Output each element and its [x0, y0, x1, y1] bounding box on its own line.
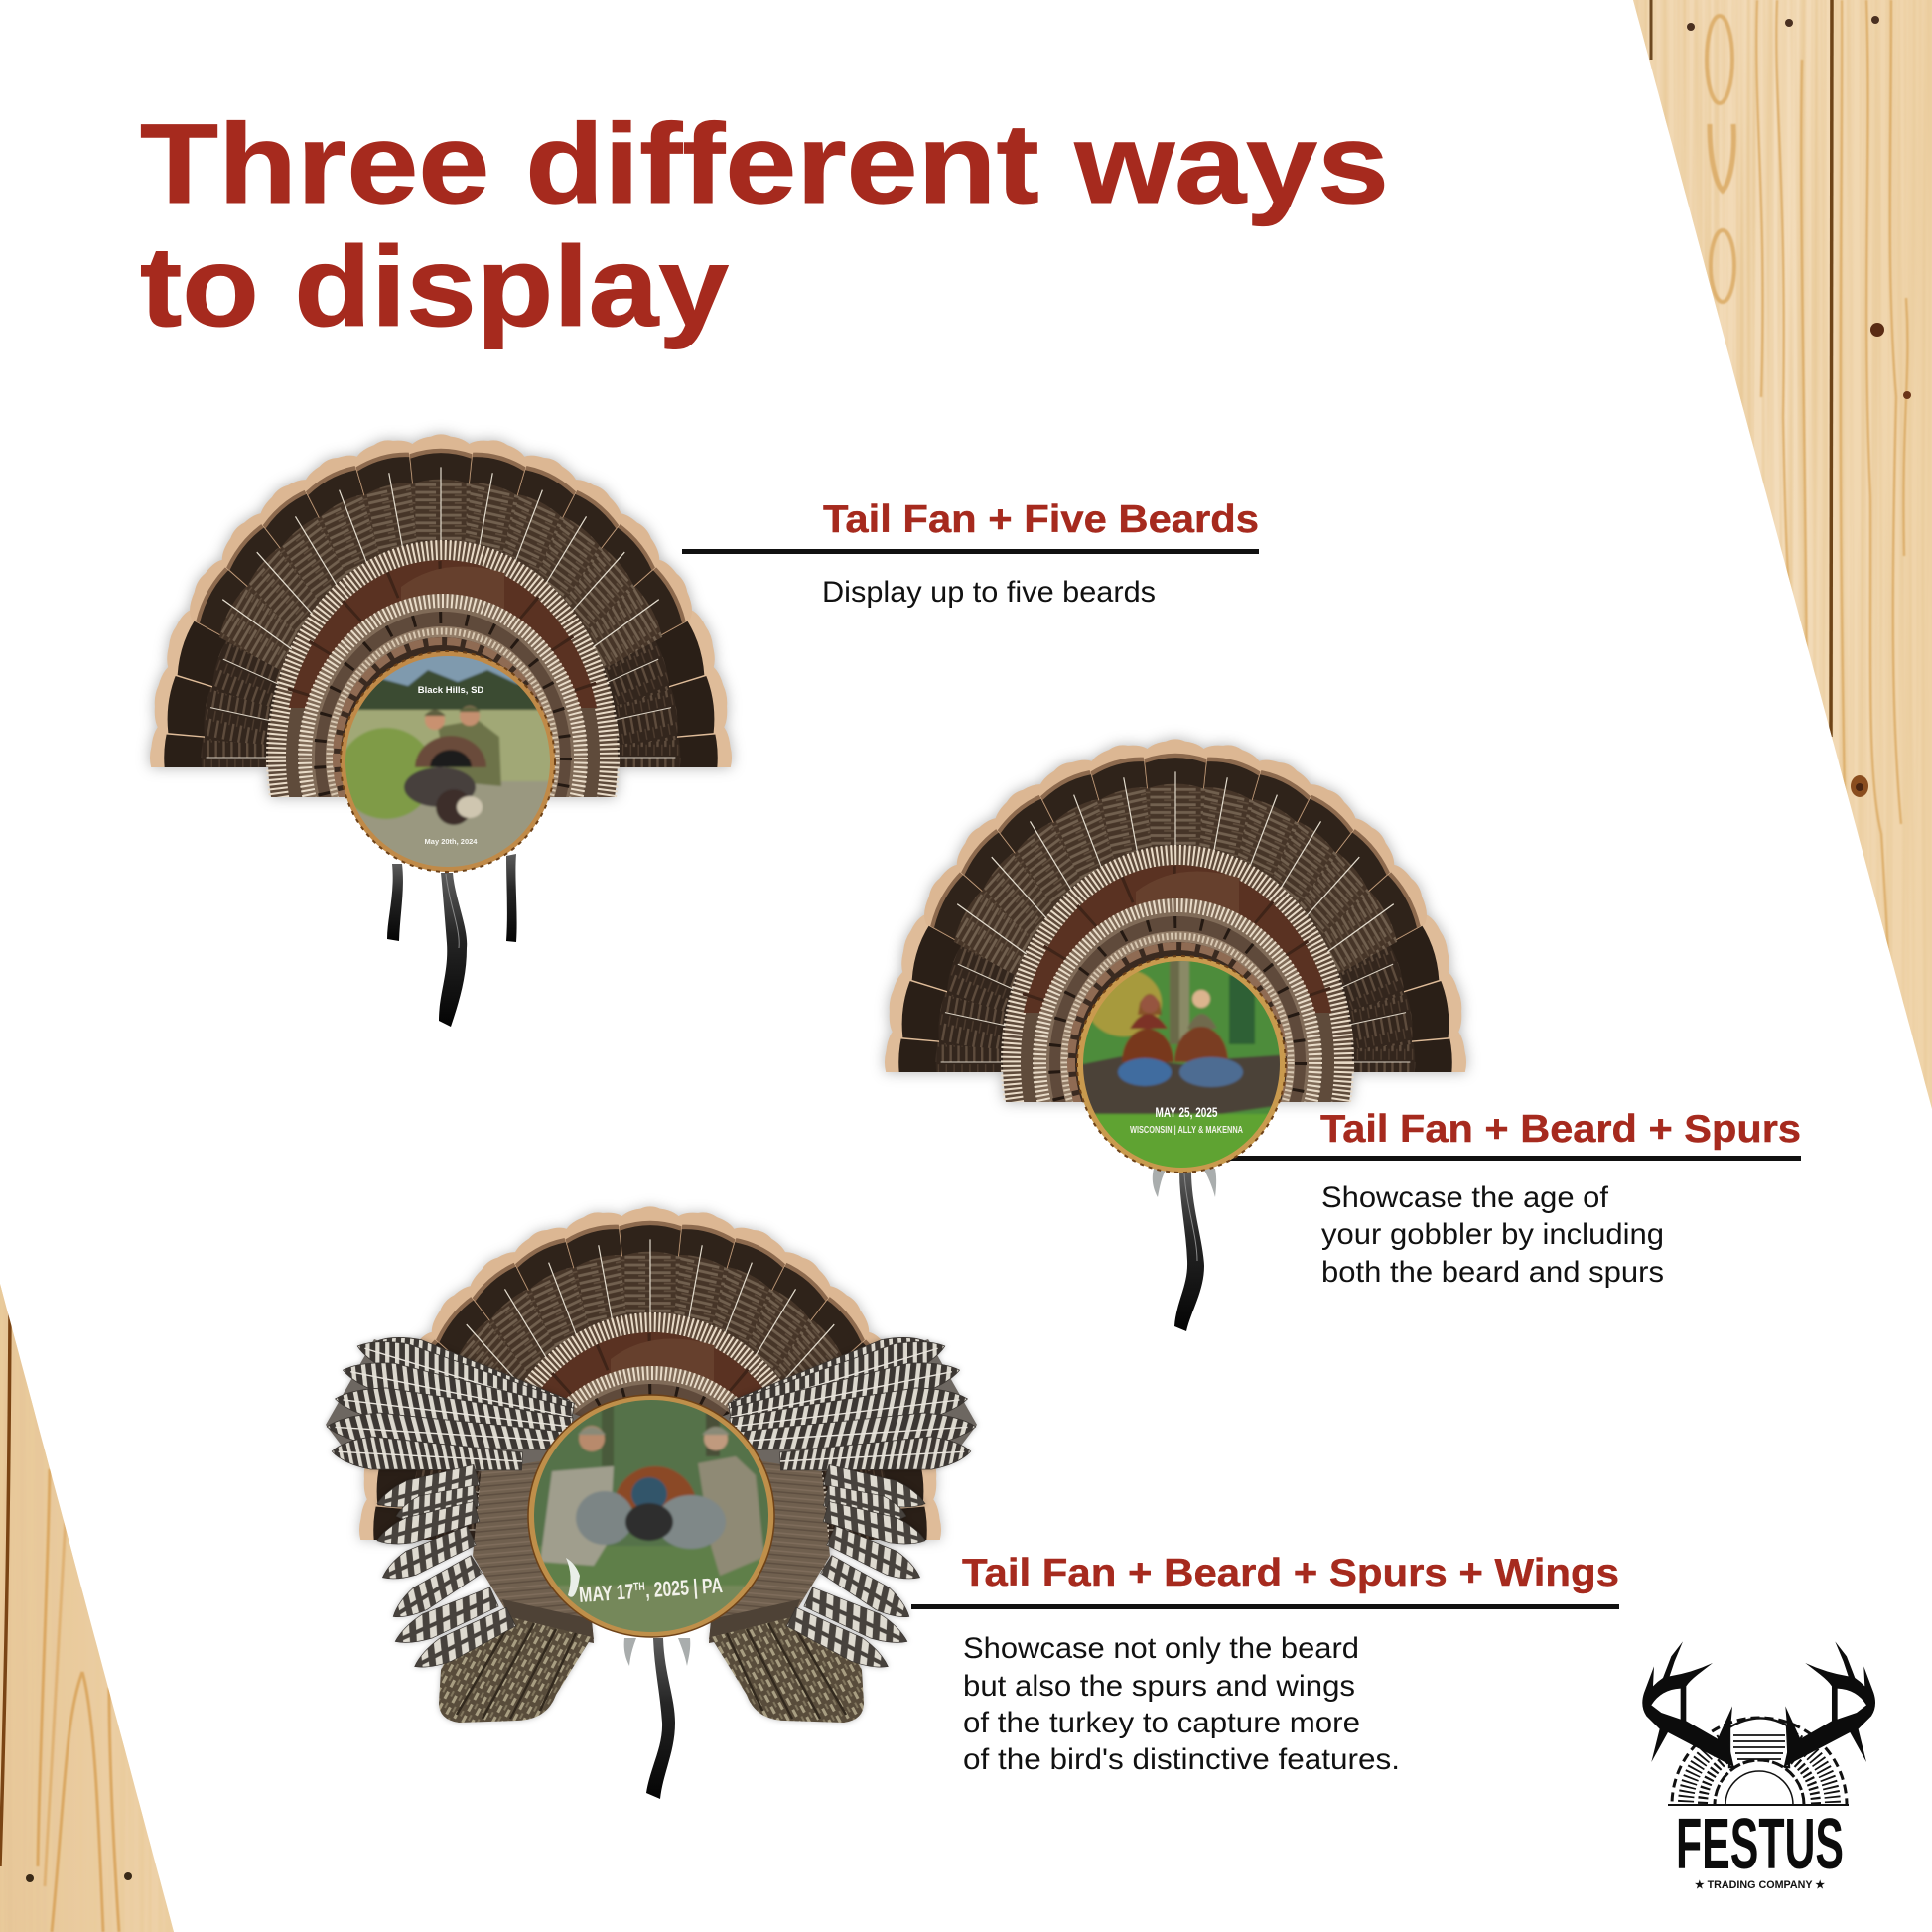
body text: both the beard and spurs	[1321, 1256, 1664, 1289]
tail fan	[884, 739, 1467, 1279]
callout: tail fan + beard + spurs	[1320, 1108, 1801, 1289]
product 3: tail fan with beard, spurs and wings	[326, 1206, 977, 1799]
logo tagline: ★ TRADING COMPANY ★	[1695, 1879, 1825, 1891]
logo icon: antlers	[1642, 1641, 1875, 1767]
body text	[963, 1632, 1400, 1776]
heading: Tail Fan + Beard + Spurs + Wings	[962, 1552, 1619, 1594]
left wing	[326, 1326, 594, 1723]
body text: of the turkey to capture more	[963, 1707, 1360, 1739]
photo disc: MAY 25, 2025	[1156, 1104, 1218, 1120]
photo disc	[527, 1392, 775, 1640]
title	[140, 101, 1389, 350]
body text: Showcase the age of	[1321, 1181, 1609, 1214]
heading: Tail Fan + Five Beards	[823, 498, 1259, 541]
callout: tail fan + five beards	[822, 498, 1259, 609]
body text	[1321, 1181, 1664, 1289]
photo disc: May 20th, 2024	[425, 837, 478, 846]
photo disc	[339, 651, 557, 872]
photo disc: MAY 17	[578, 1581, 634, 1608]
photo disc: TH	[633, 1581, 645, 1594]
title: to display	[140, 224, 729, 350]
leader line: tail fan five beards	[682, 549, 1259, 554]
right wing	[709, 1326, 977, 1723]
photo disc: Black Hills, SD	[418, 685, 483, 696]
product 1: tail fan with five beards	[149, 434, 733, 1027]
heading: Tail Fan + Beard + Spurs	[1320, 1108, 1801, 1151]
tail fan	[358, 1206, 942, 1746]
photo disc	[1072, 955, 1291, 1173]
logo icon: turkey fan	[1668, 1716, 1849, 1806]
callout: tail fan + beard + spurs + wings	[962, 1552, 1619, 1776]
body text: your gobbler by including	[1321, 1218, 1664, 1251]
beards	[387, 854, 517, 1027]
leader line: tail fan beard spurs wings	[911, 1604, 1619, 1609]
beard and spurs	[624, 1638, 690, 1799]
body text: but also the spurs and wings	[963, 1670, 1355, 1703]
photo disc: , 2025 | PA	[644, 1575, 724, 1603]
logo: Festus Trading Company	[1642, 1641, 1875, 1892]
body text: Display up to five beards	[822, 576, 1156, 609]
product 2: tail fan with beard and spurs	[884, 739, 1467, 1331]
photo disc: WISCONSIN | ALLY & MAKENNA	[1130, 1125, 1243, 1136]
tail fan	[149, 434, 733, 974]
wood panel: top right	[1633, 0, 1932, 1109]
body text: of the bird's distinctive features.	[963, 1743, 1400, 1776]
leader line: tail fan beard spurs	[1224, 1156, 1801, 1161]
beard and spurs	[1153, 1167, 1216, 1331]
wood panel: bottom left	[0, 1284, 174, 1932]
body text: Showcase not only the beard	[963, 1632, 1359, 1665]
title: Three different ways	[140, 101, 1389, 227]
